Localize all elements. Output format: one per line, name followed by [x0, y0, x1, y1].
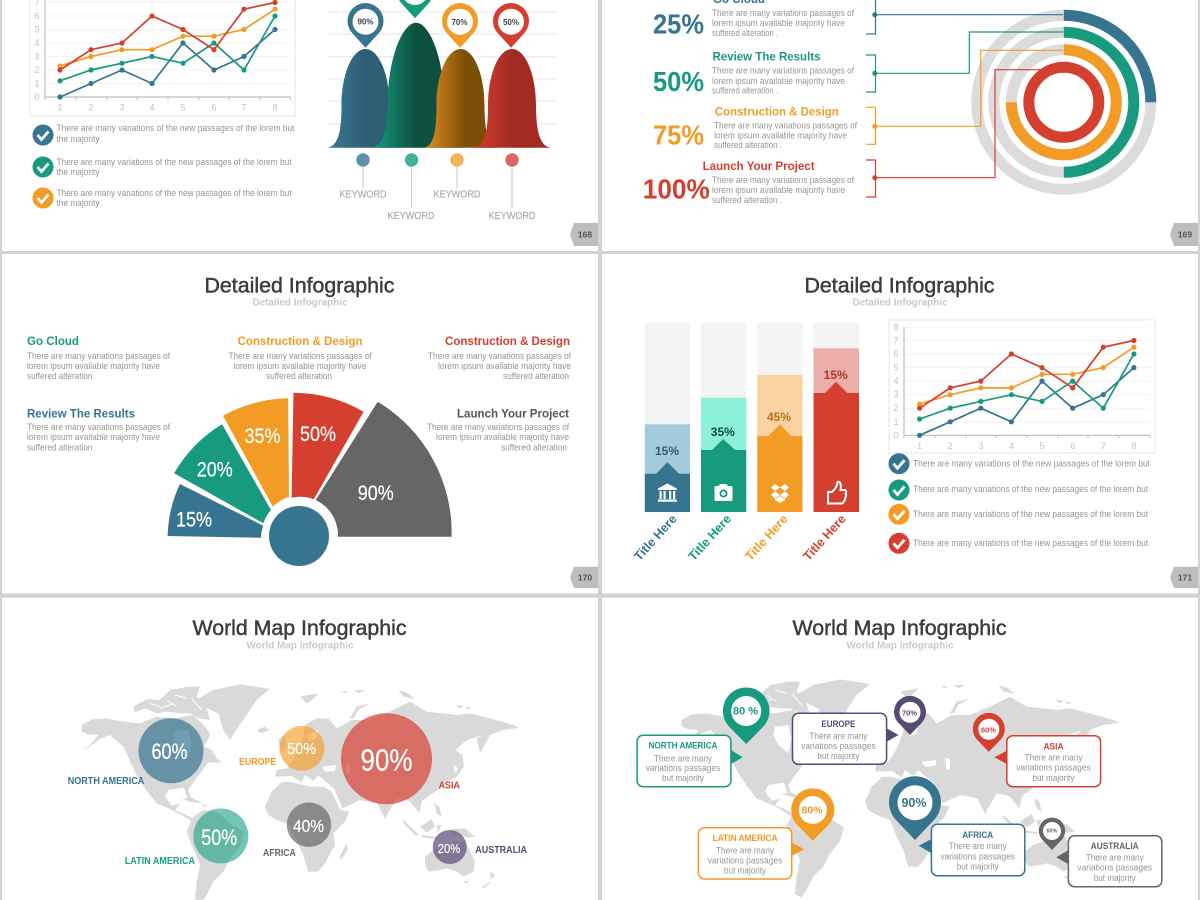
line chart: [30, 0, 295, 116]
bubble: Australia 20%: AUSTRALIA: [475, 845, 527, 856]
fan chart: [168, 393, 452, 566]
checklist item: orange: There are many variations of the new passages of the lorem but: [913, 509, 1148, 519]
row: Construction & Design 75%: suffered alteration .: [714, 140, 782, 150]
world map: [682, 679, 1119, 897]
wedge: 20%: 20%: [197, 458, 233, 482]
row: Construction & Design 75%: [653, 50, 1063, 150]
checklist item: orange: [32, 188, 292, 208]
text block: Review The Results: There are many variations passages of: [27, 422, 170, 432]
bar 4: [814, 322, 859, 512]
callout: Europe: [792, 713, 898, 764]
bar 2: 35%: [711, 425, 735, 439]
keyword marker 3: KEYWORD: [434, 190, 480, 200]
callout: Australia: There are many: [1086, 852, 1144, 862]
row: Review The Results 50%: 50%: [653, 66, 704, 97]
line chart: 5: [180, 102, 186, 112]
row: Review The Results 50%: [653, 32, 1063, 97]
line chart: 0: [34, 92, 40, 102]
callout: Latin America: but majority: [724, 866, 766, 876]
row: Launch Your Project 100%: [643, 70, 1042, 205]
bubble: North America 60%: 60%: [152, 739, 188, 764]
keyword marker 2: KEYWORD: [388, 211, 434, 222]
line chart: 8: [272, 102, 278, 112]
line chart: 7: [893, 336, 899, 346]
checklist item: red: There are many variations of the new passages of the lorem but: [913, 538, 1148, 548]
bubble: Asia 90%: ASIA: [439, 780, 460, 792]
text block: Launch Your Project: [427, 406, 569, 452]
wedge: 15%: 15%: [176, 508, 212, 532]
bubble: Latin America 50%: 50%: [201, 825, 237, 850]
map pin: 50%: 50%: [503, 18, 519, 27]
title: World Map Infographic: [792, 617, 1006, 640]
line chart: 2: [947, 441, 953, 451]
wedge: 90%: [316, 402, 452, 537]
callout: North America: There are many: [654, 753, 712, 763]
text block: Review The Results: lorem ipsum available majority have: [27, 432, 160, 442]
subtitle: Detailed Infographic: [252, 297, 348, 309]
line chart: 5: [34, 24, 40, 34]
map pin: 70% purple: [894, 696, 926, 735]
page number 170: [570, 567, 598, 588]
panel: world map with bubbles: [2, 598, 598, 900]
row: Construction & Design 75%: Construction & Design: [715, 105, 839, 119]
line chart: 2: [893, 403, 899, 413]
checklist item: blue: There are many variations of the new passages of the lorem but: [56, 123, 295, 133]
line chart: 8: [1131, 441, 1137, 451]
map pin: 80% teal: [723, 687, 770, 744]
checklist item: blue: There are many variations of the new passages of the lorem but: [913, 459, 1150, 469]
line chart: 4: [34, 38, 40, 48]
callout: Australia: variations passages: [1077, 863, 1152, 873]
text block: Go Cloud: There are many variations passages of: [27, 351, 170, 361]
callout: Asia: variations passages: [1016, 763, 1091, 773]
line chart: 0: [893, 430, 899, 440]
row: Launch Your Project 100%: lorem ipsum available majority have: [712, 185, 845, 195]
bubble: Africa 40%: [263, 802, 331, 859]
checklist item: teal: There are many variations of the new passages of the lorem but: [56, 157, 292, 167]
bubble: North America 60%: NORTH AMERICA: [68, 776, 144, 787]
row: Launch Your Project 100%: Launch Your Project: [703, 159, 815, 173]
line chart: 1: [34, 78, 40, 88]
line chart: 4: [893, 376, 899, 386]
text block: Review The Results: suffered alteration .: [27, 442, 97, 452]
callout: Asia: ASIA: [1044, 742, 1064, 752]
checklist item: red: [888, 533, 1148, 554]
title: Detailed Infographic: [204, 274, 394, 298]
page number 170: 170: [578, 572, 592, 582]
line chart: 1: [57, 102, 63, 112]
title: World Map Infographic: [192, 617, 406, 640]
panel: slide 169 concentric rings: [602, 0, 1198, 251]
text block: Construction & Design red: lorem ipsum available majority have: [438, 361, 571, 371]
text block: Go Cloud: suffered alteration .: [27, 371, 97, 381]
line chart: 3: [34, 52, 40, 62]
checklist item: teal: the majority: [56, 167, 100, 177]
map pin: 50%: [493, 3, 529, 48]
panel: slide 168 bell chart and line chart: [2, 0, 598, 251]
row: Launch Your Project 100%: suffered alteration .: [712, 195, 782, 205]
text block: Construction & Design red: Construction & Design: [445, 334, 570, 348]
line chart: 3: [119, 102, 125, 112]
callout: Europe: variations passages: [801, 741, 876, 751]
bubble: Europe 50%: 50%: [287, 741, 316, 758]
bar 1: 15%: [655, 444, 679, 458]
callout: North America: variations passages: [646, 763, 721, 773]
callout: Europe: EUROPE: [821, 719, 855, 730]
icon: camera: [714, 484, 732, 501]
bar label: red: Title Here: [800, 512, 849, 563]
map pin: 80% teal: 80 %: [733, 706, 758, 718]
text block: Construction & Design red: [428, 334, 571, 381]
callout: Asia: There are many: [1024, 753, 1083, 763]
text block: Construction & Design orange: There are many variations passages of: [228, 351, 372, 361]
text block: Go Cloud: Go Cloud: [27, 334, 79, 348]
line chart: 6: [1070, 441, 1076, 451]
text block: Construction & Design orange: suffered alteration: [266, 371, 332, 381]
map pin: 70%: [442, 3, 478, 48]
bar 2: [701, 322, 746, 512]
line chart: 1: [917, 441, 922, 451]
bubble: Europe 50%: EUROPE: [239, 757, 277, 768]
text block: Construction & Design red: suffered alteration: [503, 371, 569, 381]
bubble: Australia 20%: [433, 830, 527, 864]
map pin: 50% grey: [1039, 818, 1065, 850]
page number 169: [1170, 223, 1198, 246]
bar label: orange: Title Here: [742, 512, 791, 563]
callout: North America: NORTH AMERICA: [648, 740, 718, 752]
checklist item: orange: [888, 504, 1148, 525]
callout: Europe: but majority: [817, 751, 860, 761]
bar 3: 45%: [767, 410, 791, 424]
keyword marker 3: [434, 153, 480, 200]
wedge: 20%: [174, 424, 271, 523]
checklist item: blue: [32, 123, 295, 146]
text block: Launch Your Project: There are many variations passages of: [427, 422, 569, 432]
row: Go Cloud 25%: 25%: [653, 8, 704, 40]
checklist item: teal: [888, 480, 1148, 500]
callout: Latin America: [698, 828, 804, 879]
checklist item: orange: the majority: [56, 198, 100, 208]
callout: Latin America: variations passages: [708, 855, 783, 865]
line chart: 2: [88, 102, 94, 112]
row: Go Cloud 25%: lorem ipsum available majority have: [712, 18, 845, 28]
map pin: 90%: 90%: [357, 18, 374, 26]
line chart: [889, 320, 1155, 453]
bubble: Australia 20%: 20%: [438, 841, 461, 856]
map pin: 90% blue: 90%: [901, 796, 927, 810]
bar label: teal: Title Here: [686, 512, 734, 563]
callout: Australia: AUSTRALIA: [1091, 841, 1139, 852]
callout: Asia: [994, 736, 1101, 787]
line chart: 5: [893, 363, 899, 373]
row: Construction & Design 75%: 75%: [653, 120, 704, 150]
line chart: 4: [1009, 441, 1014, 451]
checklist item: blue: [888, 453, 1150, 474]
line chart: 7: [1101, 441, 1106, 451]
page number 168: [570, 223, 598, 246]
row: Review The Results 50%: suffered alteration .: [712, 86, 778, 96]
keyword marker 4: [488, 153, 536, 222]
row: Go Cloud 25%: [653, 0, 1063, 40]
callout: North America: but majority: [662, 773, 704, 783]
checklist item: orange: There are many variations of the new passages of the lorem but: [56, 188, 292, 198]
bar 4: 15%: [824, 368, 848, 382]
map pin: 70% purple: 70%: [902, 708, 917, 718]
wedge: 35%: 35%: [244, 425, 280, 448]
text block: Go Cloud: lorem ipsum available majority have: [27, 361, 160, 371]
icon: bank: [658, 484, 677, 502]
line chart: 4: [149, 102, 155, 112]
text block: Launch Your Project: Launch Your Project: [457, 406, 569, 420]
row: Review The Results 50%: Review The Results: [712, 50, 821, 64]
wedge: 50%: 50%: [300, 423, 336, 446]
callout: Latin America: LATIN AMERICA: [712, 833, 778, 844]
bubble: Asia 90%: [341, 713, 460, 804]
bar 1: [645, 322, 690, 512]
keyword marker 1: KEYWORD: [340, 190, 386, 200]
callout: Australia: [1056, 836, 1162, 887]
bar 3: [757, 322, 802, 512]
wedge: 15%: [168, 484, 263, 538]
text block: Construction & Design red: There are many variations passages of: [428, 351, 571, 361]
page number 168: 168: [578, 230, 592, 240]
text block: Launch Your Project: lorem ipsum available majority have: [436, 432, 569, 442]
keyword marker 1: [340, 153, 386, 200]
wedge: 90%: 90%: [358, 482, 394, 505]
row: Construction & Design 75%: lorem ipsum available majority have: [714, 131, 847, 141]
map pin: 70%: 70%: [451, 18, 468, 27]
bubble: North America 60%: [68, 718, 204, 787]
map pin: 80% orange: [791, 788, 834, 841]
subtitle: Detailed Infographic: [852, 297, 948, 309]
bar label: blue: Title Here: [631, 512, 680, 563]
callout: Australia: but majority: [1094, 873, 1136, 883]
hub circle: [269, 506, 329, 566]
callout: North America: [637, 735, 743, 787]
checklist item: blue: the majority: [56, 134, 100, 144]
title: Detailed Infographic: [804, 274, 994, 298]
line chart: 7: [241, 102, 247, 112]
concentric ring chart: [977, 15, 1151, 189]
keyword marker 2: [388, 153, 434, 222]
text block: Go Cloud: [27, 334, 170, 381]
line chart: 2: [34, 65, 40, 75]
bubble: Latin America 50%: LATIN AMERICA: [125, 856, 195, 867]
line chart: 3: [978, 441, 984, 451]
text block: Construction & Design orange: lorem ipsum available majority have: [234, 361, 366, 371]
row: Launch Your Project 100%: There are many variations passages of: [712, 175, 854, 185]
page number 171: 171: [1178, 572, 1192, 582]
text block: Construction & Design orange: [228, 334, 372, 381]
map pin: 60% red: [973, 713, 1005, 752]
line chart: 1: [893, 417, 899, 427]
text block: Construction & Design orange: Construction & Design: [238, 334, 362, 348]
line chart: 3: [893, 390, 899, 400]
callout: Africa: but majority: [957, 862, 999, 872]
bubble: Asia 90%: 90%: [360, 742, 412, 778]
panel: slide 170 fan chart: [2, 254, 598, 594]
world map: [82, 684, 519, 900]
text block: Launch Your Project: suffered alteration: [501, 442, 567, 452]
wedge: 50%: [292, 393, 364, 499]
subtitle: World Map Infographic: [846, 640, 954, 652]
line chart: 6: [893, 349, 899, 359]
map pin: 90% blue: [889, 776, 941, 840]
callout: Africa: variations passages: [940, 851, 1015, 861]
map pin: 80% orange: 80%: [801, 804, 823, 816]
bell chart: [326, 12, 556, 148]
map pin: green, clipped by the top edge: [397, 0, 433, 18]
panel: world map with pins and callouts: [602, 598, 1198, 900]
text block: Review The Results: [27, 406, 170, 452]
row: Launch Your Project 100%: 100%: [643, 174, 710, 204]
checklist item: teal: There are many variations of the new passages of the lorem but: [913, 484, 1148, 494]
icon: thumbs up: [828, 482, 846, 504]
keyword marker 4: KEYWORD: [488, 211, 536, 222]
callout: Africa: AFRICA: [962, 830, 993, 841]
map pin: 90%: [348, 3, 384, 48]
callout: Europe: There are many: [809, 731, 868, 741]
callout: Africa: There are many: [949, 841, 1007, 851]
callout: Africa: [919, 824, 1025, 876]
checklist item: teal: [32, 156, 292, 178]
line chart: 6: [211, 102, 217, 112]
callout: Asia: but majority: [1032, 773, 1075, 783]
row: Review The Results 50%: lorem ipsum available majority have: [712, 76, 845, 86]
subtitle: World Map Infographic: [246, 640, 354, 652]
icon: dropbox: [771, 484, 789, 503]
callout: Latin America: There are many: [716, 846, 774, 856]
row: Review The Results 50%: There are many variations passages of: [712, 66, 854, 76]
row: Go Cloud 25%: There are many variations passages of: [712, 8, 854, 18]
page number 169: 169: [1178, 230, 1192, 240]
map pin: 50% grey: 50%: [1046, 828, 1058, 834]
wedge: 35%: [223, 398, 289, 507]
row: Go Cloud 25%: suffered alteration .: [712, 28, 778, 38]
row: Construction & Design 75%: There are many variations passages of: [714, 120, 857, 130]
line chart: 6: [34, 11, 40, 21]
map pin: 60% red: 60%: [981, 726, 996, 734]
text block: Review The Results: Review The Results: [27, 406, 135, 420]
bubble: Africa 40%: AFRICA: [263, 848, 296, 859]
bubble: Europe 50%: [239, 726, 324, 771]
panel: slide 171 bars and line chart: [602, 254, 1198, 594]
page number 171: [1170, 567, 1198, 588]
bubble: Africa 40%: 40%: [293, 816, 324, 836]
line chart: 5: [1039, 441, 1045, 451]
line chart: 8: [893, 322, 899, 332]
bubble: Latin America 50%: [125, 808, 248, 867]
